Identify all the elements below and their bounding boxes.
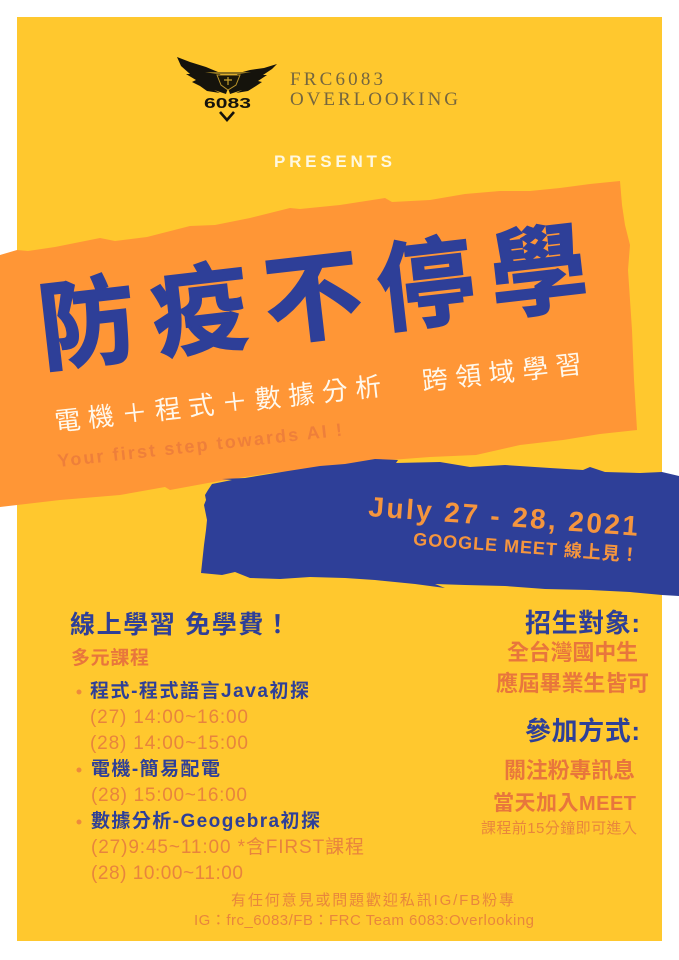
- course: programming: [76, 680, 309, 754]
- subheading: courses: 多元課程: [71, 647, 149, 669]
- course: data analysis: [76, 810, 364, 884]
- panel: how to join: 關注粉專訊息: [504, 758, 635, 783]
- panel: target students: 應屆畢業生皆可: [496, 671, 649, 696]
- course: electrical: (28) 15:00~16:00: [91, 785, 247, 806]
- course: data analysis: (28) 10:00~11:00: [91, 863, 243, 884]
- meeting platform: GOOGLE MEET 線上見！: [413, 529, 639, 566]
- course: data analysis: (27)9:45~11:00 *含FIRST課程: [91, 836, 364, 858]
- footer contact: [194, 891, 534, 929]
- heading: free tuition: 線上學習 免學費！: [70, 611, 290, 639]
- course: data analysis: 數據分析-Geogebra初探: [91, 810, 320, 832]
- main title: 防疫不停學: [33, 212, 609, 384]
- panel: free online courses: [70, 611, 364, 884]
- logo: winged 6083 emblem: [177, 57, 277, 120]
- course: programming: (27) 14:00~16:00: [90, 707, 248, 728]
- course: electrical: [76, 757, 247, 806]
- course: programming: 程式-程式語言Java初探: [90, 680, 309, 702]
- panel: how to join: 參加方式:: [525, 716, 640, 746]
- footer contact: 有任何意見或問題歡迎私訊IG/FB粉專: [231, 891, 514, 909]
- event date: July 27 - 28, 2021: [367, 491, 639, 542]
- course: electrical: 電機-簡易配電: [91, 757, 220, 780]
- footer contact: IG：frc_6083/FB：FRC Team 6083:Overlooking: [194, 912, 534, 929]
- team name: FRC6083: [290, 69, 383, 90]
- panel: how to join: [481, 716, 640, 837]
- panel: target students: [496, 608, 649, 696]
- panel: target students: 全台灣國中生: [507, 640, 638, 665]
- team name: [290, 69, 458, 110]
- english tagline: Your first step towards AI !: [56, 420, 343, 471]
- course: programming: (28) 14:00~15:00: [90, 733, 248, 754]
- subtitle: 電機＋程式＋數據分析 跨領域學習: [53, 349, 583, 437]
- logo: winged 6083 emblem: 6083: [204, 95, 251, 112]
- team name: OVERLOOKING: [290, 89, 458, 110]
- panel: how to join: 當天加入MEET: [493, 792, 636, 815]
- orange brush banner: [0, 181, 637, 507]
- panel: target students: 招生對象:: [525, 608, 640, 638]
- presents label: PRESENTS: [274, 152, 392, 171]
- blue brush banner: [201, 459, 679, 596]
- panel: how to join: 課程前15分鐘即可進入: [481, 820, 637, 837]
